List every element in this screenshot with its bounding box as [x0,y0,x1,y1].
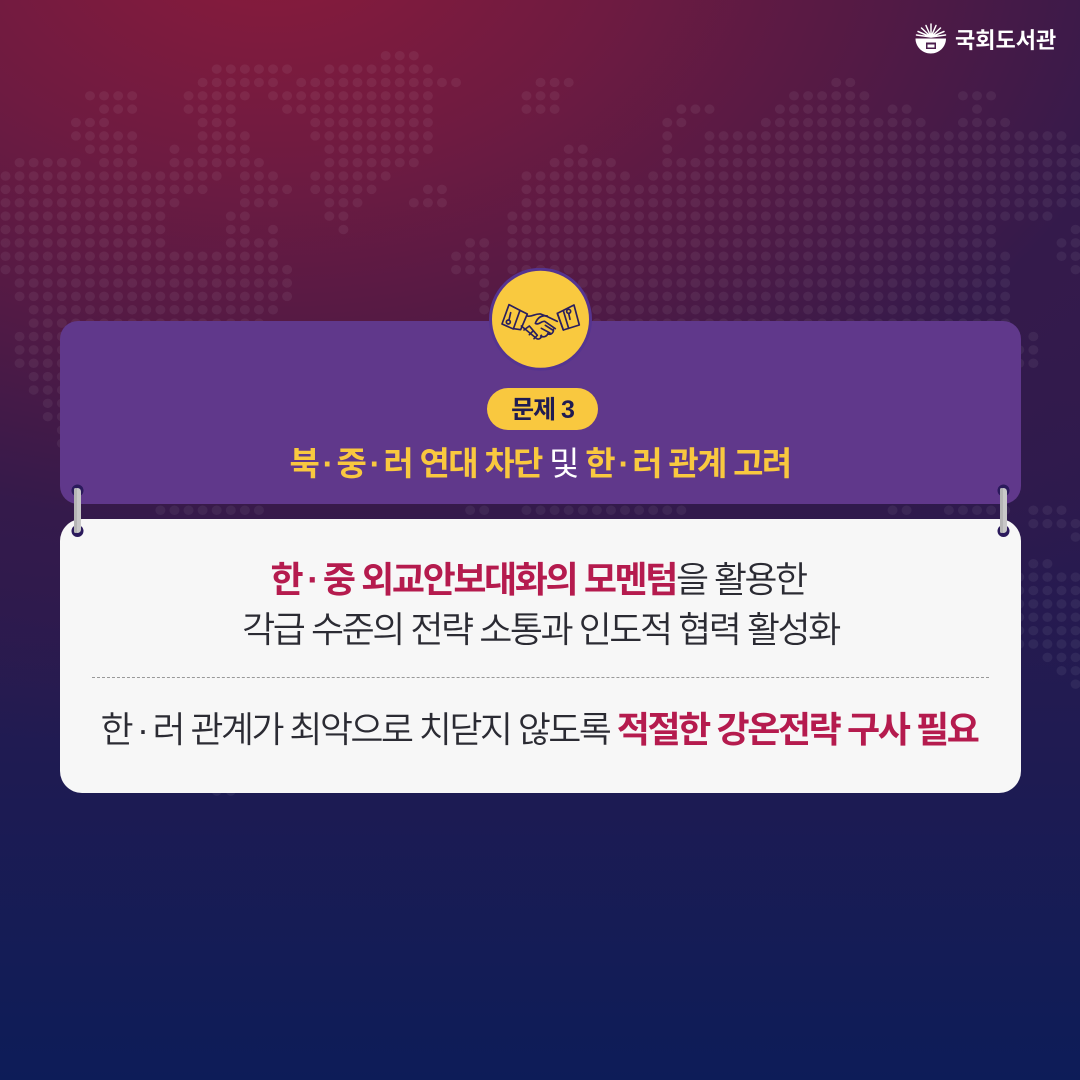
icon: handshake badge [489,268,592,370]
text: first point: 각급 수준의 전략 소통과 인도적 협력 활성화 [242,609,839,650]
panel: problem header [60,321,1021,504]
badge: problem number: 문제 3 [511,396,574,424]
text: first point: 한·중 외교안보대화의 모멘텀을 활용한 [271,559,805,600]
icon: right hanging ring [998,484,1010,537]
icon: left hanging ring [72,484,84,537]
text: second point: 한·러 관계가 최악으로 치닫지 않도록 적절한 강온전략 구사 필요 [101,709,977,750]
icon: library emblem [916,23,946,54]
text: first point [242,559,840,650]
heading: problem title: 북·중·러 연대 차단 및 한·러 관계 고려 [289,445,790,482]
badge: problem number [487,388,598,430]
logo text: 국회도서관 [955,28,1056,53]
logo: National Assembly Library [916,23,1056,54]
panel: content card [60,519,1021,793]
divider [92,677,989,678]
